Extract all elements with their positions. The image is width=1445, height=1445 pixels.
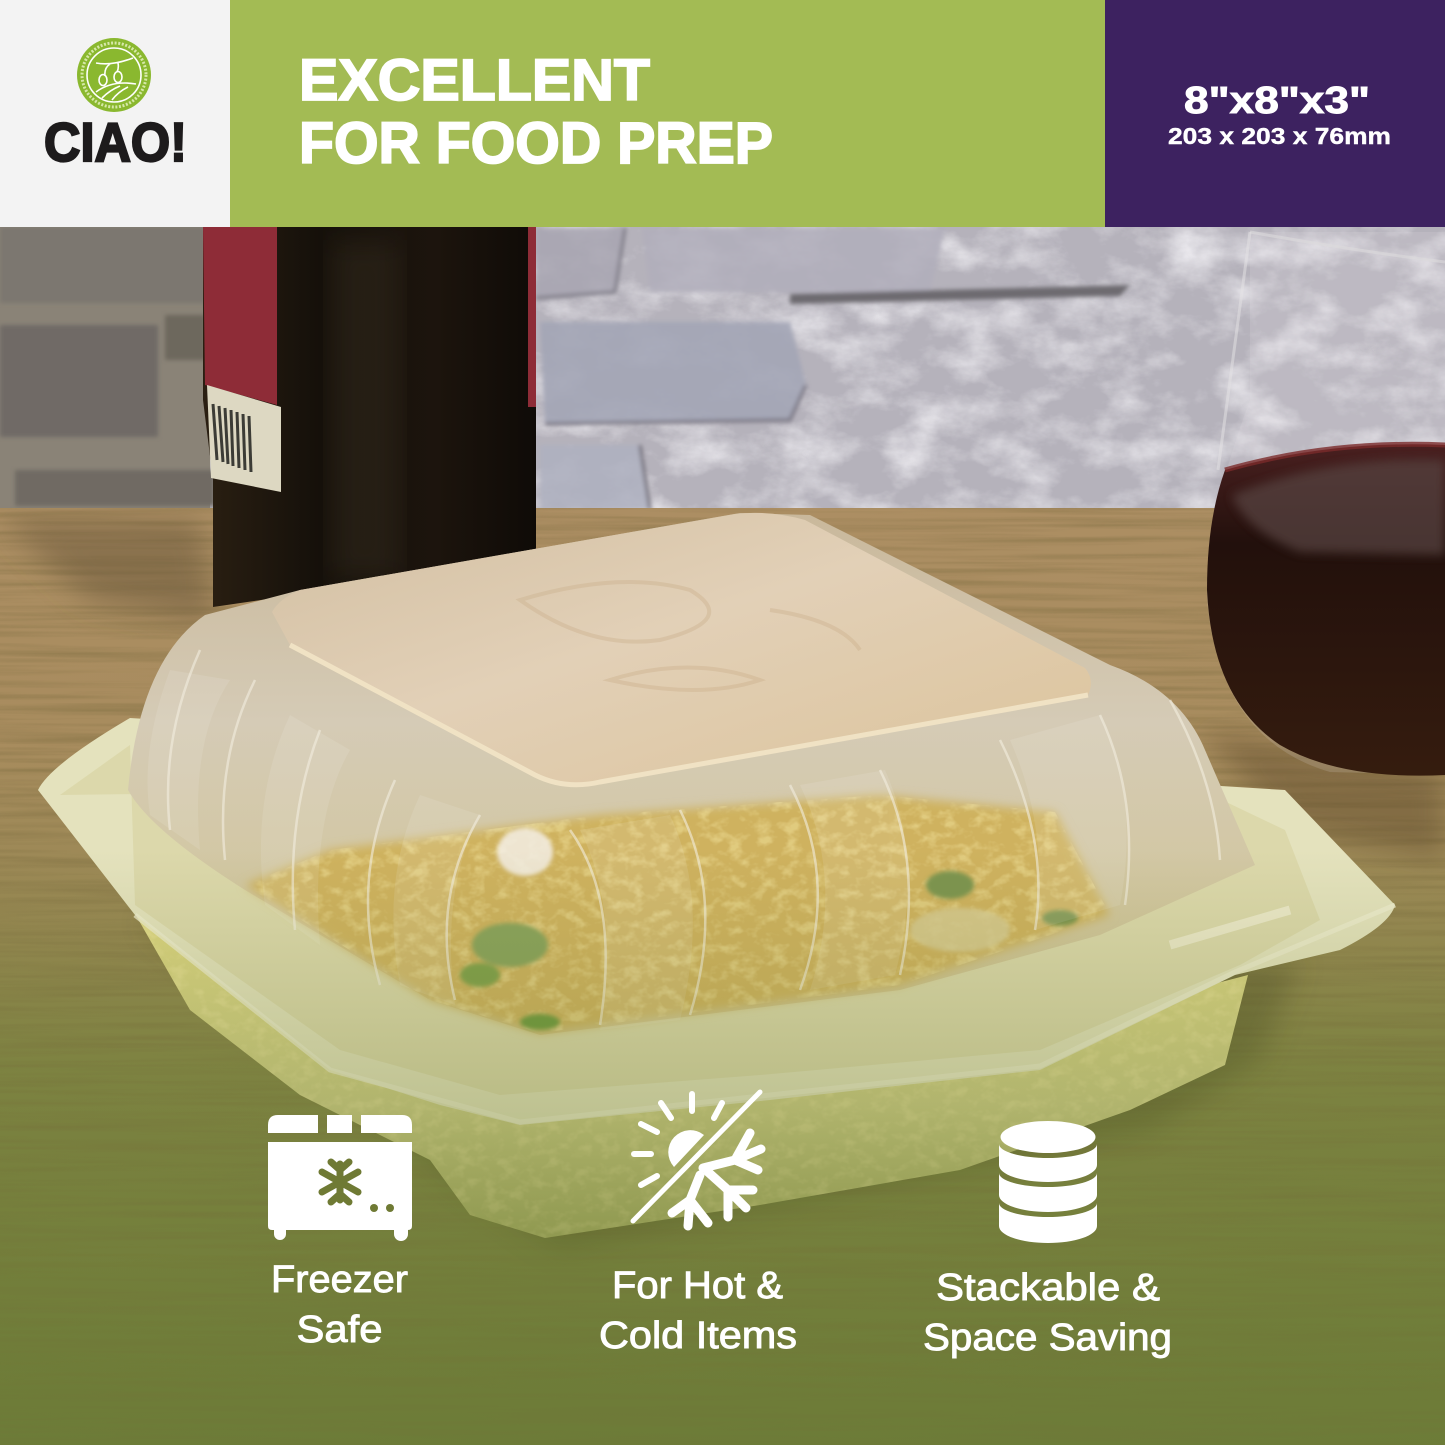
- header: logo panel: [0, 0, 230, 227]
- flange highlight: [135, 905, 1395, 1122]
- dome ribs: [148, 670, 1127, 1030]
- photo background: brick wall: [0, 227, 1445, 517]
- logo wordmark: CIAO!: [44, 111, 187, 173]
- title: FOR FOOD PREP: [299, 111, 773, 176]
- label: Safe: [296, 1309, 382, 1351]
- dome: [128, 513, 1255, 1035]
- photo: food container: [38, 513, 1395, 1250]
- photo: wine glass: [1207, 232, 1445, 776]
- label: [923, 1267, 1172, 1359]
- header: green title panel: [230, 0, 1106, 227]
- photo: wine bottle: [203, 227, 536, 607]
- icon: freezer: [268, 1115, 412, 1241]
- icon: olive logo badge: [77, 38, 151, 112]
- label: Cold Items: [599, 1315, 797, 1357]
- title: EXCELLENT: [299, 48, 650, 113]
- title: [299, 48, 773, 176]
- feature: freezer safe: [268, 1115, 412, 1351]
- lid top panel: [272, 513, 1091, 785]
- label: [271, 1259, 408, 1351]
- green colour overlay: [0, 850, 1445, 1445]
- label: Stackable &: [936, 1267, 1160, 1309]
- label: [599, 1265, 797, 1357]
- icon: sun and snowflake: [633, 1092, 761, 1226]
- shadow under container: [140, 920, 1300, 1250]
- feature: stackable: [923, 1121, 1172, 1359]
- label: For Hot &: [612, 1265, 783, 1307]
- dimensions: 203 x 203 x 76mm: [1168, 123, 1391, 149]
- header: purple dimensions panel: [1105, 0, 1445, 227]
- label: Space Saving: [923, 1317, 1172, 1359]
- photo background: wooden table: [0, 508, 1445, 1445]
- label: Freezer: [271, 1259, 408, 1301]
- feature: hot and cold: [599, 1092, 797, 1357]
- flange: [38, 718, 1395, 1125]
- food seen through dome: [245, 795, 1110, 1033]
- icon: stacked discs: [999, 1121, 1097, 1243]
- dimensions: [1168, 80, 1391, 149]
- dimensions: 8"x8"x3": [1184, 80, 1370, 122]
- container base with food: [130, 905, 1248, 1238]
